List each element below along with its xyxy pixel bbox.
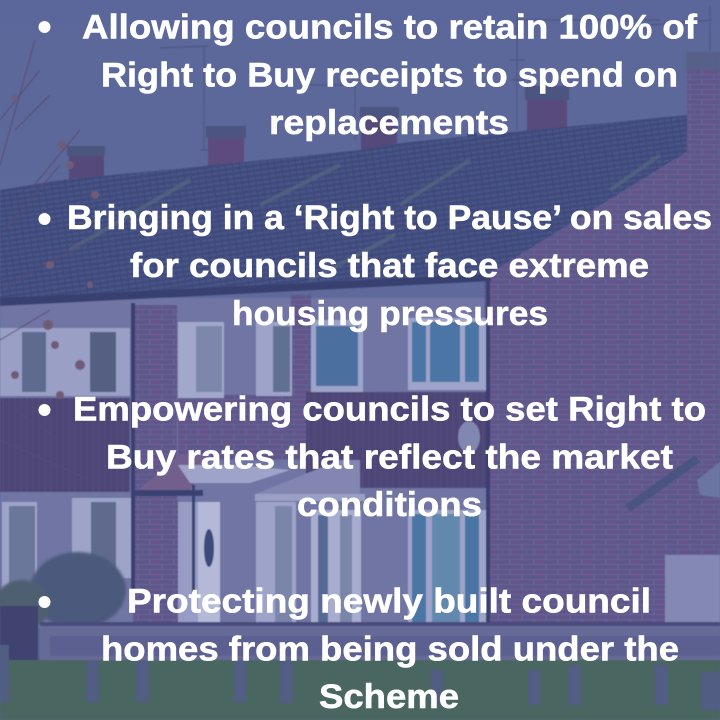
bullet 3: set rates: Buy rates that reflect the market <box>106 438 673 476</box>
background: chimneys <box>67 86 569 180</box>
bullet 2: right to pause: for councils that face extreme <box>130 247 649 285</box>
background: white garage on right <box>665 555 720 627</box>
background: porch canopies <box>133 455 365 501</box>
bullet 1: retain receipts: replacements <box>269 104 509 142</box>
background: right chimney stack <box>686 52 720 190</box>
background: dark cladding panels <box>0 392 486 492</box>
bullet 2: right to pause <box>38 199 712 333</box>
background: brick piers <box>133 305 177 630</box>
background: front boundary wall <box>0 606 720 666</box>
bullet 3: set rates: Empowering councils to set Right to <box>73 390 706 428</box>
background: roof eave <box>0 274 492 306</box>
bullet 3: set rates <box>38 390 706 524</box>
background: satellite dish <box>458 421 480 453</box>
bullet 1: retain receipts: Allowing councils to retain 100% of <box>82 8 698 46</box>
bullet 4: protect new homes: Scheme <box>319 678 459 716</box>
background: diagonal lean-to on gable <box>625 455 720 512</box>
background: bare tree on left <box>0 40 90 480</box>
bullet 1: retain receipts: Right to Buy receipts to spend on <box>101 56 678 94</box>
bullet 4: protect new homes: homes from being sold under the <box>101 630 679 668</box>
background: downpipes <box>131 281 490 626</box>
background: main roof <box>0 115 690 302</box>
background: lower windows and doors <box>2 498 486 632</box>
bullet 1: retain receipts <box>38 8 698 142</box>
background: sky <box>0 0 720 320</box>
background: upper windows <box>0 318 488 398</box>
background: grass <box>0 660 720 720</box>
background: roof aerials <box>160 5 712 150</box>
background: hedge <box>0 552 126 630</box>
background: moss streaks on roof <box>70 155 660 280</box>
background: autumn leaves on tree <box>11 95 99 399</box>
bullet 4: protect new homes: Protecting newly built council <box>127 582 651 620</box>
background: wooden posts <box>0 645 720 710</box>
bullet 4: protect new homes <box>38 582 679 716</box>
bullet 3: set rates: conditions <box>297 486 482 524</box>
background: brick gable wall <box>484 60 720 630</box>
background: lilac render wall of terrace <box>0 298 492 628</box>
bullet 2: right to pause: housing pressures <box>232 295 548 333</box>
bullet 2: right to pause: Bringing in a ‘Right to Pause’ on sales <box>67 199 712 237</box>
